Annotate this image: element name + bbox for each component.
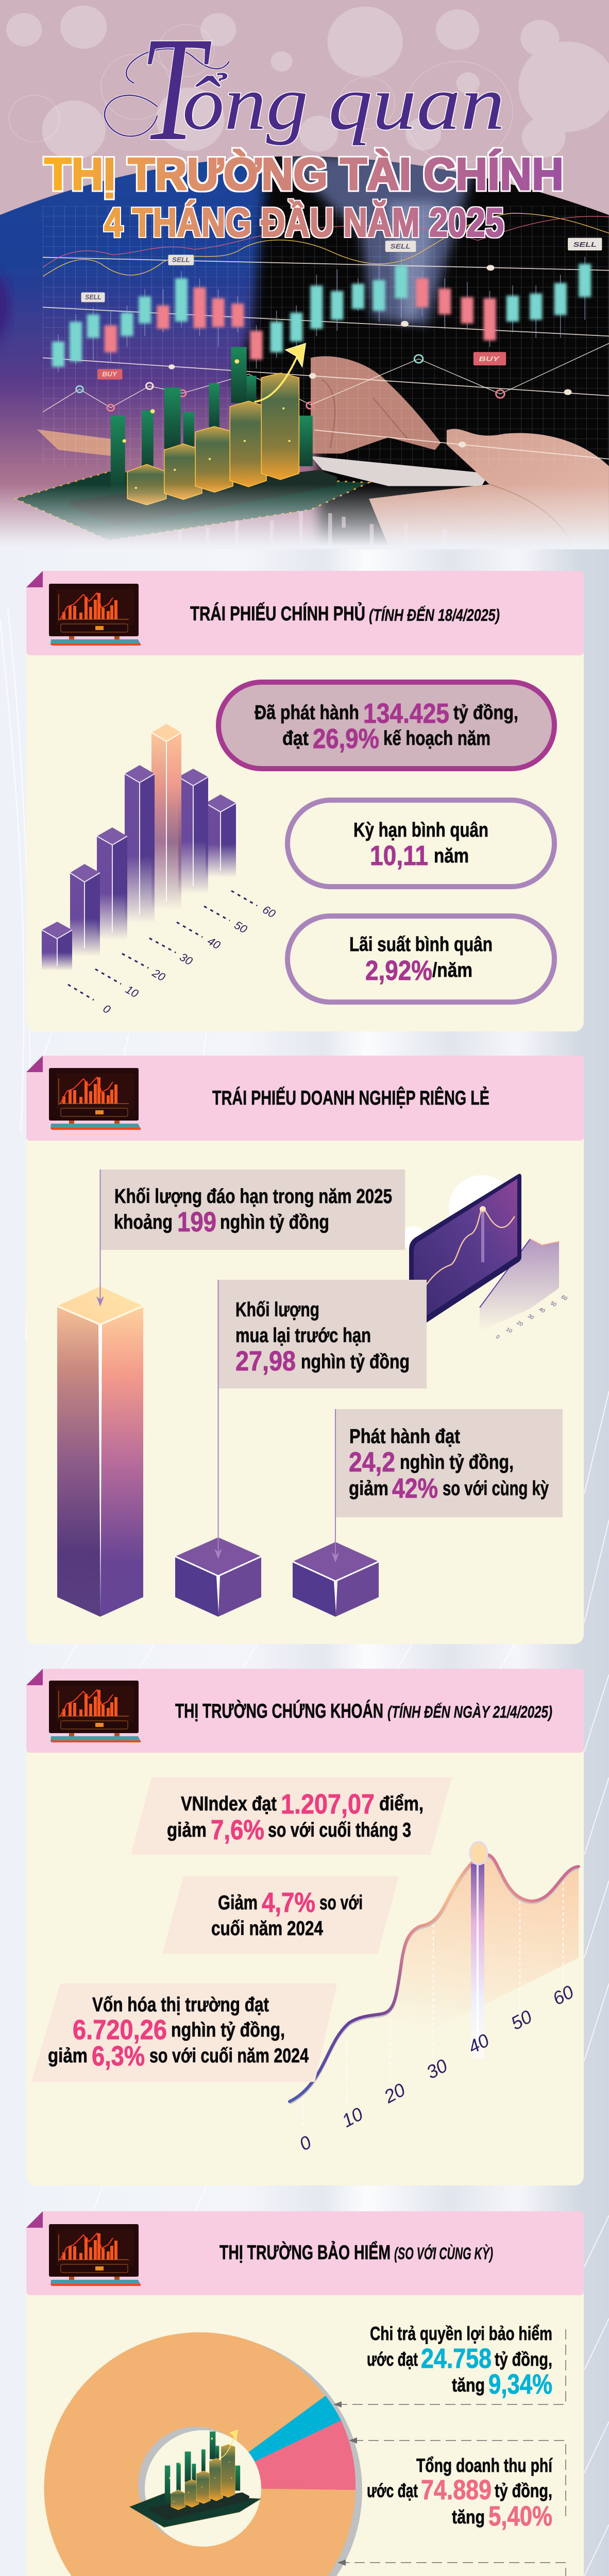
panel: thị trường chứng khoán [26, 1669, 584, 2185]
callout: giảm so với cuối năm: Giảm [218, 1892, 258, 1914]
small cube 1 [175, 1537, 261, 1617]
callout: chi trả quyền lợi: ước đạt [367, 2349, 418, 2370]
callout: khối lượng mua lại [218, 1280, 427, 1388]
isometric bar chart: 0 [101, 1002, 113, 1016]
callout: VNIndex: giảm [167, 1819, 207, 1841]
callout: chi trả quyền lợi [333, 2323, 566, 2408]
line chart: 60 [549, 1981, 577, 2009]
callout: phát hành: 42% [392, 1473, 438, 1504]
callout: vốn hóa: Vốn hóa thị trường đạt [92, 1994, 269, 2016]
icon: chart on board [129, 2430, 261, 2528]
callout: VNIndex: so với cuối tháng 3 [268, 1819, 411, 1841]
subtitle: 4 tháng đầu năm 2025: 4 THÁNG ĐẦU NĂM 2025 [104, 199, 504, 245]
title: Thị trường tài chính: THỊ TRƯỜNG TÀI CHÍNH [44, 148, 564, 199]
callout: vốn hóa [31, 1984, 337, 2082]
heading: (TÍNH ĐẾN 18/4/2025) [369, 606, 500, 624]
callout: khối lượng đáo hạn: Khối lượng đáo hạn trong năm 2025 [114, 1185, 392, 1208]
tall column [57, 1286, 143, 1617]
hero banner [0, 0, 609, 564]
callout: kỳ hạn bình quân [287, 800, 554, 887]
callout: đã phát hành: đạt [282, 727, 309, 750]
callout: đã phát hành: tỷ đồng, [453, 702, 518, 724]
panel: trái phiếu chính phủ [26, 571, 584, 1031]
title: Tổng quan: ổng [182, 60, 308, 146]
heading: THỊ TRƯỜNG CHỨNG KHOÁN [175, 1700, 383, 1722]
line chart: 0 [296, 2131, 315, 2155]
icon: tablet with line chart: 30 [527, 1313, 535, 1321]
callout: VNIndex: 1.207,07 [281, 1789, 375, 1820]
line chart: 40 [464, 2029, 493, 2058]
callout: VNIndex: 7,6% [211, 1815, 264, 1845]
isometric bar chart: 50 [232, 919, 250, 936]
callout: đã phát hành: Đã phát hành [255, 702, 359, 724]
callout: tổng vốn đầu tư [304, 2560, 566, 2576]
callout: VNIndex: VNIndex đạt [181, 1793, 277, 1815]
heading: (TÍNH ĐẾN NGÀY 21/4/2025) [387, 1703, 552, 1721]
icon: tablet with line chart: 20 [515, 1319, 524, 1328]
callout: vốn hóa: so với cuối năm 2024 [149, 2045, 309, 2067]
icon: monitor [49, 2224, 141, 2286]
callout: tổng doanh thu phí: 74.889 [421, 2475, 492, 2505]
callout: đã phát hành: kế hoạch năm [383, 727, 490, 750]
callout: lãi suất bình quân: Lãi suất bình quân [349, 934, 493, 956]
callout: khối lượng mua lại: mua lại trước hạn [235, 1325, 371, 1347]
title: Tổng quan: T [140, 6, 212, 172]
heading: TRÁI PHIẾU DOANH NGHIỆP RIÊNG LẺ [212, 1087, 489, 1109]
panel: thị trường bảo hiểm [26, 2211, 584, 2576]
callout: khối lượng đáo hạn: khoảng [114, 1211, 173, 1233]
icon: tablet with line chart: 40 [538, 1307, 546, 1314]
section header 4 [26, 2211, 584, 2295]
isometric bar chart: 60 [260, 903, 278, 921]
sell and buy chart tags: SELL [391, 242, 411, 250]
3D bar chart on tablet [15, 343, 369, 540]
arrow 3 [332, 1409, 339, 1563]
callout: chi trả quyền lợi: 9,34% [488, 2369, 552, 2400]
isometric bar chart: 40 [205, 935, 223, 952]
arrow 2 [214, 1280, 222, 1559]
icon: monitor [49, 1681, 141, 1742]
line chart: 10 [338, 2103, 366, 2131]
icon: tablet with line chart: 0 [495, 1334, 500, 1341]
callout: đã phát hành: 134.425 [363, 698, 449, 729]
panel: trái phiếu doanh nghiệp riêng lẻ [26, 1056, 584, 1644]
callout: tổng doanh thu phí: 5,40% [488, 2501, 552, 2532]
sell and buy chart tags: SELL [172, 256, 190, 263]
callout: khối lượng mua lại: Khối lượng [235, 1299, 319, 1321]
callout: lãi suất bình quân: 2,92% [365, 955, 432, 986]
callout: vốn hóa: nghìn tỷ đồng, [171, 2019, 285, 2041]
callout: kỳ hạn bình quân: năm [434, 845, 469, 867]
callout: tổng doanh thu phí: tăng [452, 2506, 485, 2528]
title: Tổng quan: quan [328, 60, 505, 146]
callout: giảm so với cuối năm [162, 1876, 399, 1954]
section header 2 [26, 1056, 584, 1141]
callout: giảm so với cuối năm: cuối năm 2024 [211, 1918, 323, 1940]
callout: phát hành: so với cùng kỳ [443, 1478, 549, 1500]
heading: TRÁI PHIẾU CHÍNH PHỦ [190, 602, 365, 625]
callout: chi trả quyền lợi: tỷ đồng, [495, 2349, 552, 2370]
callout: phát hành: giảm [349, 1478, 388, 1500]
isometric bar chart: 20 [150, 966, 168, 984]
isometric bar chart [42, 724, 278, 1016]
heading: (SO VỚI CÙNG KỲ) [394, 2244, 493, 2263]
line chart: 20 [380, 2079, 409, 2108]
callout: kỳ hạn bình quân: Kỳ hạn bình quân [353, 819, 488, 841]
icon: monitor [49, 584, 141, 646]
callout: khối lượng đáo hạn: 199 [177, 1207, 216, 1238]
sell and buy chart tags: SELL [573, 241, 597, 248]
callout: phát hành [335, 1409, 563, 1517]
callout: giảm so với cuối năm: so với [319, 1892, 363, 1914]
callout: phát hành: Phát hành đạt [349, 1426, 460, 1448]
line chart [290, 1842, 579, 2155]
callout: vốn hóa: 6,3% [92, 2041, 145, 2072]
icon: monitor [49, 1068, 141, 1130]
line chart: 50 [507, 2006, 535, 2034]
callout: chi trả quyền lợi: 24.758 [421, 2343, 492, 2374]
callout: kỳ hạn bình quân: 10,11 [370, 840, 428, 871]
callout: chi trả quyền lợi: Chi trả quyền lợi bảo hiểm [370, 2323, 552, 2344]
sell and buy chart tags: BUY [102, 370, 118, 378]
heading: THỊ TRƯỜNG BẢO HIỂM [219, 2241, 391, 2264]
line chart: 30 [422, 2055, 451, 2083]
callout: lãi suất bình quân [287, 916, 554, 1002]
callout: tổng doanh thu phí: Tổng doanh thu phí [416, 2455, 553, 2476]
sell and buy chart tags: SELL [85, 293, 102, 301]
callout: VNIndex [131, 1777, 452, 1855]
callout: đã phát hành: 26,9% [313, 723, 379, 754]
callout: tổng doanh thu phí [349, 2437, 566, 2532]
icon: tablet with line chart: 50 [549, 1300, 557, 1308]
section header 1 [26, 571, 584, 655]
callout: vốn hóa: giảm [48, 2045, 88, 2067]
callout: chi trả quyền lợi: tăng [452, 2375, 485, 2396]
isometric bar chart: 10 [123, 983, 141, 1001]
sell and buy chart tags [81, 238, 602, 380]
callout: giảm so với cuối năm: 4,7% [262, 1887, 315, 1918]
callout: tổng doanh thu phí: ước đạt [367, 2480, 418, 2501]
callout: khối lượng mua lại: nghìn tỷ đồng [301, 1351, 410, 1373]
callout: khối lượng đáo hạn [100, 1170, 405, 1250]
callout: khối lượng mua lại: 27,98 [235, 1346, 296, 1377]
small cube 2 [293, 1542, 379, 1617]
arrow 1 [96, 1170, 104, 1307]
callout: VNIndex: điểm, [379, 1793, 424, 1815]
callout: khối lượng đáo hạn: nghìn tỷ đồng [220, 1211, 329, 1233]
icon: tablet with line chart [402, 1174, 568, 1341]
callout: phát hành: nghìn tỷ đồng, [400, 1451, 514, 1473]
icon: tablet with line chart: 60 [560, 1294, 568, 1302]
donut chart [44, 2332, 362, 2576]
callout: đã phát hành [218, 682, 554, 769]
callout: phát hành: 24,2 [349, 1447, 395, 1478]
callout: tổng doanh thu phí: tỷ đồng, [495, 2480, 552, 2501]
sell and buy chart tags: BUY [479, 354, 500, 363]
isometric bar chart: 30 [177, 951, 195, 968]
title: Tổng quan [105, 6, 505, 172]
section header 3 [26, 1669, 584, 1753]
icon: tablet with line chart: 10 [505, 1327, 513, 1334]
callout: vốn hóa: 6.720,26 [73, 2014, 167, 2045]
callout: lãi suất bình quân: /năm [432, 959, 472, 981]
